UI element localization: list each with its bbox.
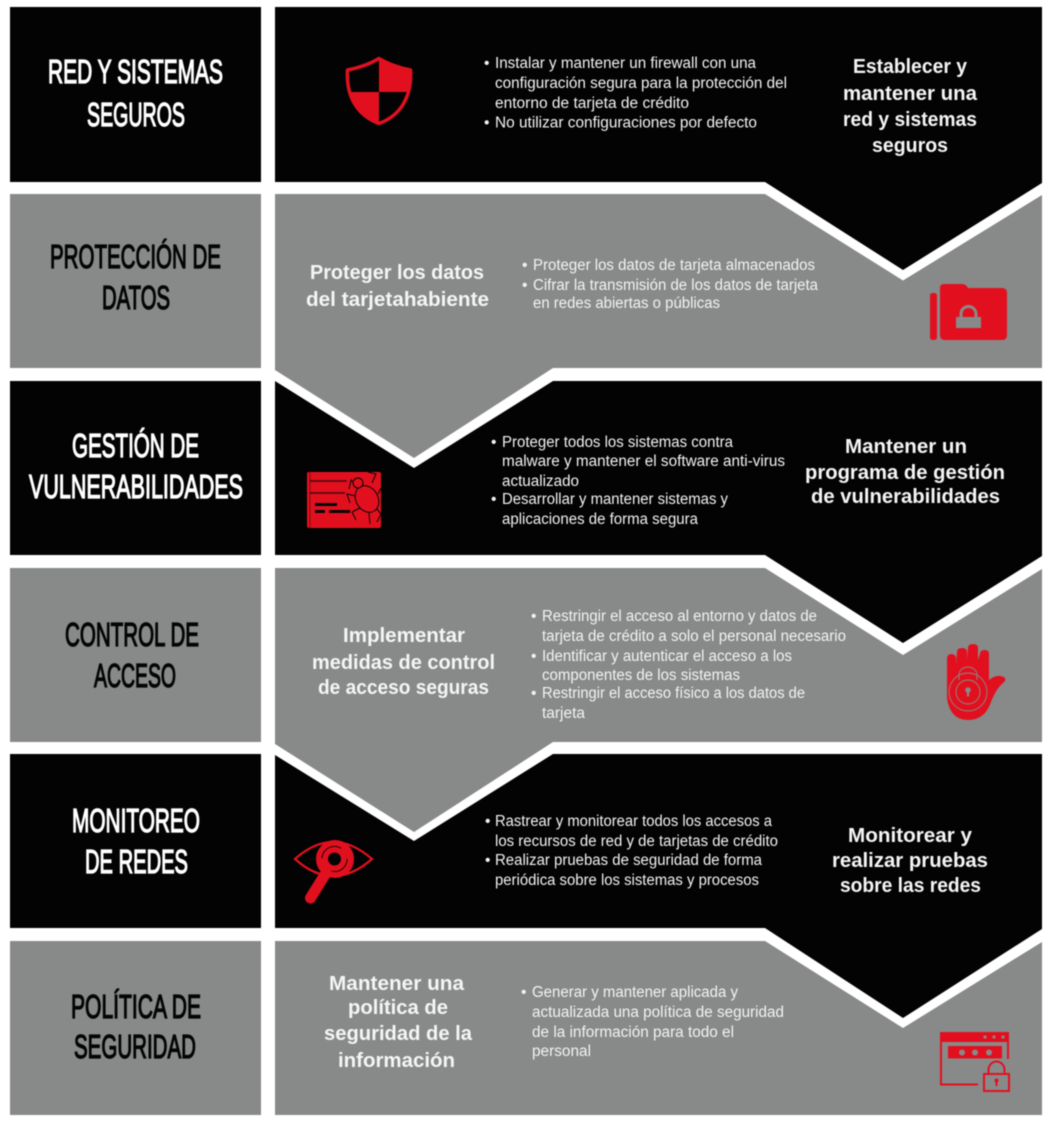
row 4 bullet list: •: [531, 608, 536, 625]
row 6 label panel: política de seguridad: SEGURIDAD: [74, 1028, 196, 1065]
row 1 bullet list: No utilizar configuraciones por defecto: [495, 114, 757, 132]
row 3 heading: programa de gestión: [805, 462, 1005, 484]
row 2 heading: [306, 262, 489, 311]
row 4 bullet list: Restringir el acceso físico a los datos de: [542, 685, 805, 702]
row 5 bullet list: •: [485, 852, 490, 869]
row 2 heading: del tarjetahabiente: [306, 289, 489, 311]
row 6 heading: [324, 973, 473, 1072]
row 5 bullet list: periódica sobre los sistemas y procesos: [495, 872, 759, 889]
row 2 heading: Proteger los datos: [310, 262, 484, 284]
row 6 label panel: política de seguridad: POLÍTICA DE: [71, 988, 201, 1025]
row 1 label panel: red y sistemas seguros: [10, 7, 261, 182]
row 4 heading: de acceso seguras: [318, 677, 489, 699]
row 5 label panel: monitoreo de redes: DE REDES: [85, 843, 188, 880]
icon: eye with magnifying glass: [295, 842, 372, 898]
row 5 bullet list: [485, 813, 778, 889]
icon: browser window with password and lock: [940, 1032, 1009, 1091]
panel: row 5 black chevron: [275, 754, 1042, 1018]
row 5 heading: sobre las redes: [840, 875, 981, 897]
row 1 bullet list: configuración segura para la protección del: [495, 75, 787, 92]
row 1 heading: mantener una: [843, 83, 978, 105]
row 3 bullet list: •: [491, 491, 496, 508]
row 3 heading: Mantener un: [845, 436, 967, 458]
row 1 heading: red y sistemas: [843, 109, 977, 131]
row 5 heading: [832, 825, 988, 897]
row 5 label panel: monitoreo de redes: MONITOREO: [72, 802, 200, 839]
row 5 heading: Monitorear y: [848, 825, 973, 847]
row 4 bullet list: •: [531, 685, 536, 702]
row 5 bullet list: los recursos de red y de tarjetas de crédito: [495, 833, 778, 850]
row 3 label panel: gestión de vulnerabilidades: GESTIÓN DE: [72, 427, 199, 464]
panel: row 2 grey chevron: [275, 194, 1042, 458]
row 2 label panel: protección de datos: DATOS: [102, 279, 170, 316]
row 6 heading: política de: [348, 997, 448, 1019]
row 6 heading: seguridad de la: [324, 1023, 473, 1045]
row 4 bullet list: Restringir el acceso al entorno y datos de: [542, 608, 817, 625]
panel: row 3 black chevron: [275, 381, 1042, 643]
row 1 bullet list: •: [484, 114, 489, 132]
row 3 bullet list: malware y mantener el software anti-virus: [502, 453, 785, 470]
row 2 bullet list: Cifrar la transmisión de los datos de tarjeta: [533, 277, 818, 294]
row 2 bullet list: •: [522, 277, 527, 294]
row 4 bullet list: componentes de los sistemas: [542, 667, 740, 684]
row 2 label panel: protección de datos: [10, 194, 261, 368]
icon: shield: [347, 58, 411, 124]
row 1 bullet list: [484, 55, 787, 132]
row 4 heading: Implementar: [343, 625, 465, 647]
row 4 heading: [312, 625, 495, 699]
row 3 label panel: gestión de vulnerabilidades: VULNERABILIDADES: [29, 468, 243, 505]
row 4 label panel: control de acceso: [10, 568, 261, 742]
row 5 heading: realizar pruebas: [832, 850, 988, 872]
row 4 bullet list: tarjeta de crédito a solo el personal necesario: [542, 628, 846, 645]
row 1 bullet list: •: [484, 55, 489, 72]
row 5 bullet list: Realizar pruebas de seguridad de forma: [495, 852, 762, 869]
row 1 heading: [843, 56, 978, 157]
row 6 heading: información: [338, 1050, 455, 1072]
row 4 bullet list: Identificar y autenticar el acceso a los: [542, 648, 792, 665]
row 1 heading: seguros: [872, 135, 948, 157]
row 6 bullet list: •: [521, 984, 526, 1001]
row 1 label panel: red y sistemas seguros: SEGUROS: [87, 96, 185, 133]
row 4 label panel: control de acceso: CONTROL DE: [65, 616, 199, 653]
row 4 heading: medidas de control: [312, 652, 495, 674]
row 2 bullet list: en redes abiertas o públicas: [533, 295, 720, 312]
row 3 heading: de vulnerabilidades: [811, 486, 1000, 508]
row 4 label panel: control de acceso: ACCESO: [94, 657, 176, 694]
row 5 label panel: monitoreo de redes: [10, 754, 261, 928]
row 1 bullet list: entorno de tarjeta de crédito: [495, 95, 689, 112]
row 3 bullet list: [491, 434, 785, 528]
row 2 bullet list: [522, 257, 818, 312]
row 4 bullet list: [531, 608, 846, 722]
row 4 bullet list: •: [531, 648, 536, 665]
row 1 heading: Establecer y: [853, 56, 968, 78]
row 3 heading: [805, 436, 1005, 508]
row 6 bullet list: Generar y mantener aplicada y: [532, 984, 738, 1001]
row 2 label panel: protección de datos: PROTECCIÓN DE: [50, 238, 221, 275]
panel: row 1 black chevron: [275, 7, 1042, 270]
row 2 bullet list: •: [522, 257, 527, 274]
row 5 bullet list: Rastrear y monitorear todos los accesos a: [495, 813, 772, 830]
row 6 bullet list: [521, 984, 784, 1060]
row 6 bullet list: actualizada una política de seguridad: [532, 1004, 784, 1021]
row 6 heading: Mantener una: [329, 973, 465, 995]
panel: row 6 grey chevron: [275, 941, 1042, 1115]
row 3 bullet list: •: [491, 434, 496, 451]
panel: row 4 grey chevron: [275, 568, 1042, 832]
row 3 label panel: gestión de vulnerabilidades: [10, 381, 261, 555]
row 4 bullet list: tarjeta: [542, 705, 585, 722]
row 2 bullet list: Proteger los datos de tarjeta almacenados: [533, 257, 815, 274]
row 6 label panel: política de seguridad: [10, 941, 261, 1115]
row 6 bullet list: personal: [532, 1043, 591, 1060]
row 1 label panel: red y sistemas seguros: RED Y SISTEMAS: [48, 53, 223, 90]
icon: hand with lock: [947, 644, 1005, 720]
row 1 bullet list: Instalar y mantener un firewall con una: [495, 55, 756, 72]
icon: folder with lock: [930, 284, 1007, 340]
row 6 bullet list: de la información para todo el: [532, 1024, 734, 1041]
row 3 bullet list: Desarrollar y mantener sistemas y: [502, 491, 728, 508]
row 5 bullet list: •: [485, 813, 490, 830]
row 3 bullet list: aplicaciones de forma segura: [502, 511, 698, 528]
row 3 bullet list: Proteger todos los sistemas contra: [502, 434, 733, 451]
row 3 bullet list: actualizado: [502, 473, 579, 490]
icon: credit card with bug: [307, 472, 384, 528]
